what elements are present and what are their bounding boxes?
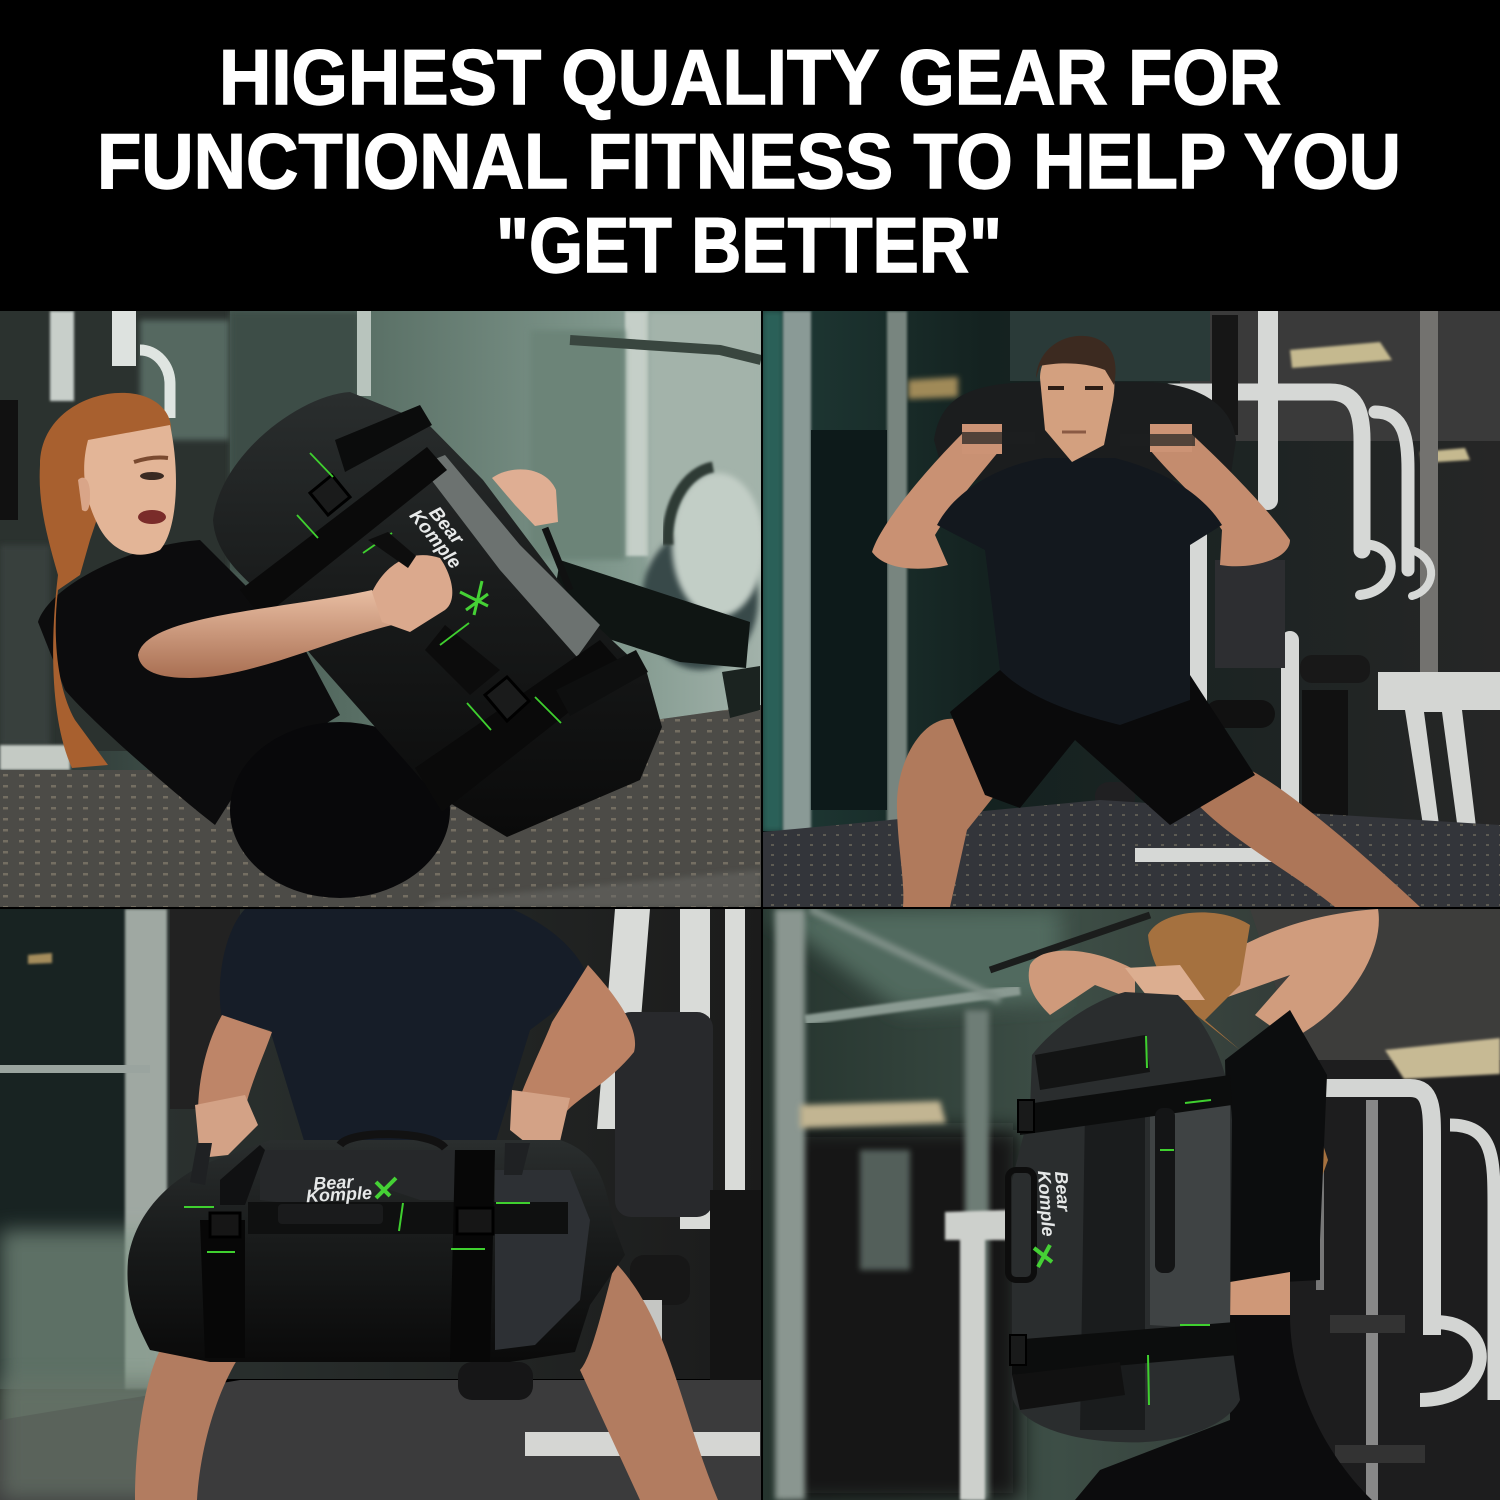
bag held by woman bbox=[213, 392, 662, 837]
panel: woman with sandbag behind neck bbox=[763, 909, 1500, 1500]
floor bbox=[763, 800, 1500, 907]
woman hair bbox=[1148, 912, 1328, 1175]
man shirt bbox=[220, 909, 590, 1160]
woman hair bbox=[40, 393, 171, 768]
man hands bbox=[962, 424, 1192, 454]
title: HIGHEST QUALITY GEAR FOR bbox=[219, 33, 1281, 121]
bag logo: Komple bbox=[405, 506, 465, 574]
floor bbox=[0, 1380, 761, 1500]
bag logo: Komple bbox=[1034, 1170, 1058, 1237]
title: "GET BETTER" bbox=[496, 201, 1002, 289]
panel: man with sandbag on shoulders bbox=[763, 311, 1500, 907]
gym background bbox=[0, 311, 764, 781]
gym background bbox=[763, 311, 1500, 832]
woman face bbox=[78, 425, 176, 555]
carpet floor bbox=[0, 705, 761, 907]
gym machine frame bbox=[1320, 1088, 1494, 1500]
foreground carpet shade bbox=[420, 870, 761, 907]
bag logo: Bear bbox=[424, 503, 468, 550]
gym background bbox=[763, 909, 1500, 1500]
man arms bbox=[872, 428, 1290, 569]
man legs bbox=[135, 1262, 718, 1500]
title: FUNCTIONAL FITNESS TO HELP YOU bbox=[97, 117, 1401, 205]
bag logo bbox=[1034, 1169, 1075, 1237]
woman arms bbox=[1029, 909, 1379, 1040]
gym machine white frame bbox=[1168, 311, 1436, 803]
seat pad bbox=[1215, 560, 1285, 668]
panel: man lifting sandbag bbox=[0, 909, 761, 1500]
woman arm bbox=[138, 590, 392, 678]
bag logo: Bear bbox=[1051, 1171, 1074, 1213]
bench bbox=[1378, 672, 1500, 824]
man shirt bbox=[937, 458, 1222, 725]
man shorts bbox=[950, 670, 1255, 825]
bag logo: Komple bbox=[305, 1183, 372, 1206]
woman torso and hips bbox=[38, 540, 450, 898]
title bbox=[97, 33, 1401, 289]
sandbag across shoulders bbox=[934, 384, 1236, 458]
sandbag held by man bbox=[127, 1134, 625, 1362]
woman body and leggings bbox=[1075, 1010, 1372, 1500]
sandbag held upright bbox=[1008, 992, 1240, 1442]
man head bbox=[1036, 336, 1116, 462]
woman leg bbox=[550, 560, 750, 668]
man arms bbox=[198, 965, 635, 1115]
panel: woman doing sandbag twist bbox=[0, 311, 764, 907]
man legs bbox=[897, 719, 1420, 907]
man hands bbox=[195, 1090, 570, 1158]
woman hand bbox=[372, 555, 452, 632]
bag logo: Bear bbox=[313, 1172, 355, 1194]
gym background bbox=[0, 909, 761, 1420]
woman hands bbox=[1125, 965, 1205, 1000]
